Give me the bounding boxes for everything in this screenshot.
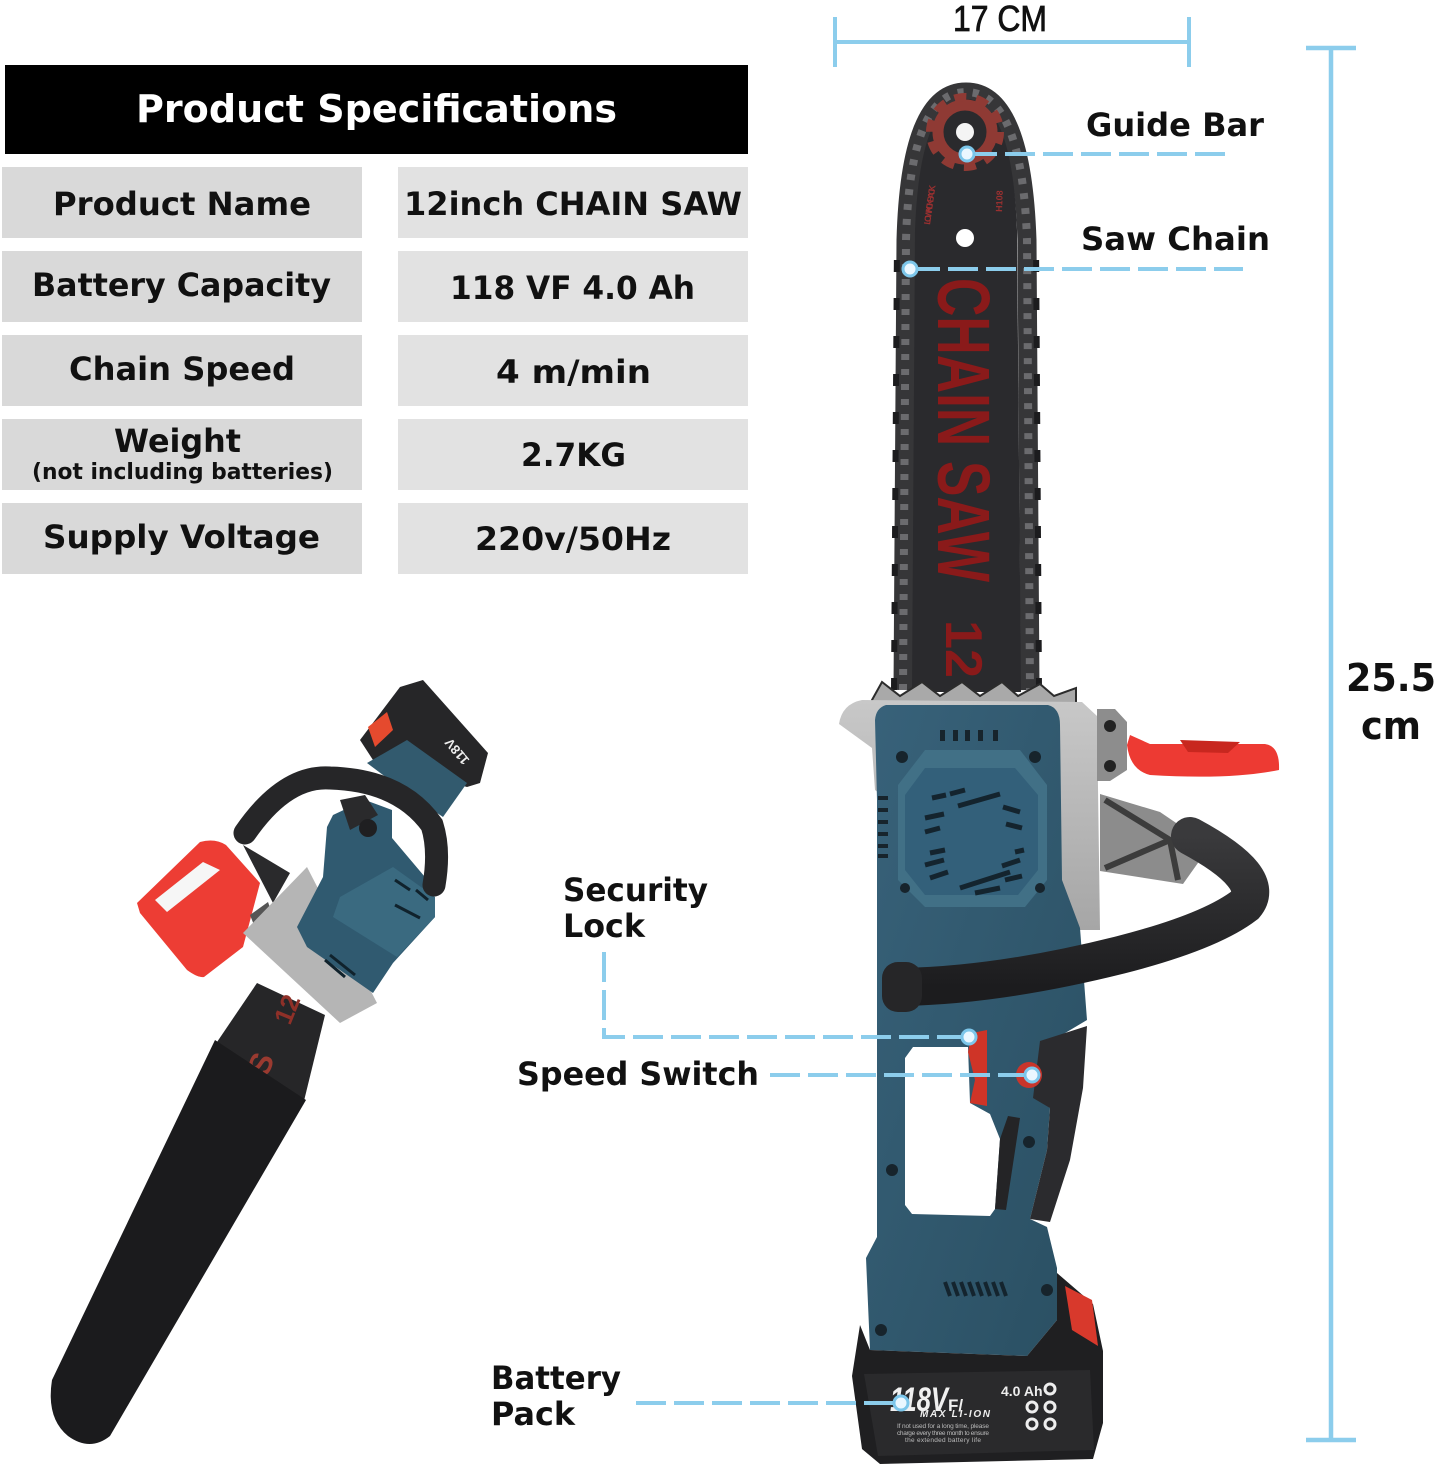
height dimension: 25.5 cm: cm: [1361, 704, 1421, 748]
callout: saw chain: Saw Chain: [1081, 220, 1270, 258]
row: battery capacity: [2, 251, 748, 322]
battery pack: 118V: [890, 1381, 950, 1419]
motor cover: [898, 750, 1047, 907]
guide bar: [912, 97, 1021, 692]
battery pack: MAX LI-ION: [920, 1409, 991, 1420]
row: battery capacity: 118 VF 4.0 Ah: [450, 269, 695, 307]
chainsaw: angled view with scabbard: [51, 680, 488, 1444]
row: chain speed: [2, 335, 748, 406]
height dimension: 25.5 cm: [1306, 48, 1436, 1440]
guide bar: H108: [994, 190, 1005, 212]
handle gusset: [1100, 794, 1210, 884]
sprocket: [930, 97, 1000, 167]
row: chain speed: 4 m/min: [496, 353, 651, 391]
row: supply voltage: [2, 503, 748, 574]
body screws and vents: [875, 730, 1053, 1336]
row: weight: 2.7KG: [521, 436, 626, 474]
row: supply voltage: 220v/50Hz: [475, 520, 671, 558]
red guard: [137, 841, 260, 977]
callout: guide bar: [960, 106, 1264, 161]
row: product name: 12inch CHAIN SAW: [404, 185, 742, 223]
heading: product specifications: Product Specifications: [136, 87, 617, 131]
silver base: [243, 867, 377, 1023]
battery pack: charge every three month to ensure: [897, 1430, 989, 1437]
callout: battery pack: Battery: [491, 1359, 621, 1397]
row: product name: Product Name: [53, 185, 311, 223]
guide bar: CHAIN SAW: [922, 278, 1005, 582]
front handle: [882, 836, 1250, 1012]
row: battery capacity: Battery Capacity: [32, 266, 331, 304]
saw chain: [894, 92, 1039, 690]
heading: product specifications: [5, 65, 748, 154]
window opening: [905, 1047, 1000, 1216]
callout: security lock: Lock: [563, 907, 646, 945]
guide bar stub: [215, 983, 325, 1105]
callout: security lock: [563, 871, 976, 1044]
row: product name: [2, 167, 748, 238]
callout: battery pack: [491, 1359, 908, 1433]
battery pack: 4.0 Ah: [1001, 1383, 1042, 1399]
rear grip: [1030, 1026, 1087, 1222]
callout: speed switch: Speed Switch: [517, 1055, 759, 1093]
chainsaw: angled view with scabbard: S: [240, 1047, 281, 1081]
callout: speed switch: [517, 1055, 1039, 1093]
guide bar: LOW KICKBACK: [922, 184, 938, 225]
battery pack: the extended battery life: [905, 1437, 981, 1444]
height dimension: 25.5 cm: 25.5: [1346, 656, 1436, 700]
chainsaw: angled view with scabbard: 12: [268, 990, 306, 1028]
motor vents: [925, 790, 1024, 893]
panel: product specifications table: [2, 65, 748, 574]
tool body: [866, 705, 1087, 1356]
gusset and bolts: [243, 845, 290, 935]
row: weight: (not including batteries): [32, 460, 333, 485]
row: supply voltage: Supply Voltage: [43, 518, 320, 556]
speed switch button: [1016, 1062, 1042, 1088]
row: weight: Weight: [114, 422, 241, 460]
front handle arc: [245, 778, 437, 885]
row: chain speed: Chain Speed: [69, 350, 295, 388]
chainsaw: front view: [839, 92, 1279, 1464]
callout: battery pack: Pack: [491, 1395, 576, 1433]
blue body: [297, 795, 435, 993]
battery pack: If not used for a long time, please: [897, 1423, 989, 1430]
trigger: [968, 1030, 987, 1106]
scabbard: [51, 1040, 306, 1444]
width dimension: 17 CM: [835, 0, 1189, 67]
callout: guide bar: Guide Bar: [1086, 106, 1264, 144]
battery on angled view: 118V: [442, 735, 472, 768]
bracket and chain brake guard: [1097, 709, 1279, 781]
callout: security lock: Security: [563, 871, 708, 909]
row: weight: [2, 419, 748, 490]
battery on angled view: [360, 680, 488, 817]
battery pack: F/: [948, 1396, 963, 1415]
silver cover plate: [839, 682, 1100, 930]
battery pack: [852, 1273, 1103, 1464]
guide bar: 12: [934, 620, 992, 678]
callout: saw chain: [903, 220, 1270, 276]
